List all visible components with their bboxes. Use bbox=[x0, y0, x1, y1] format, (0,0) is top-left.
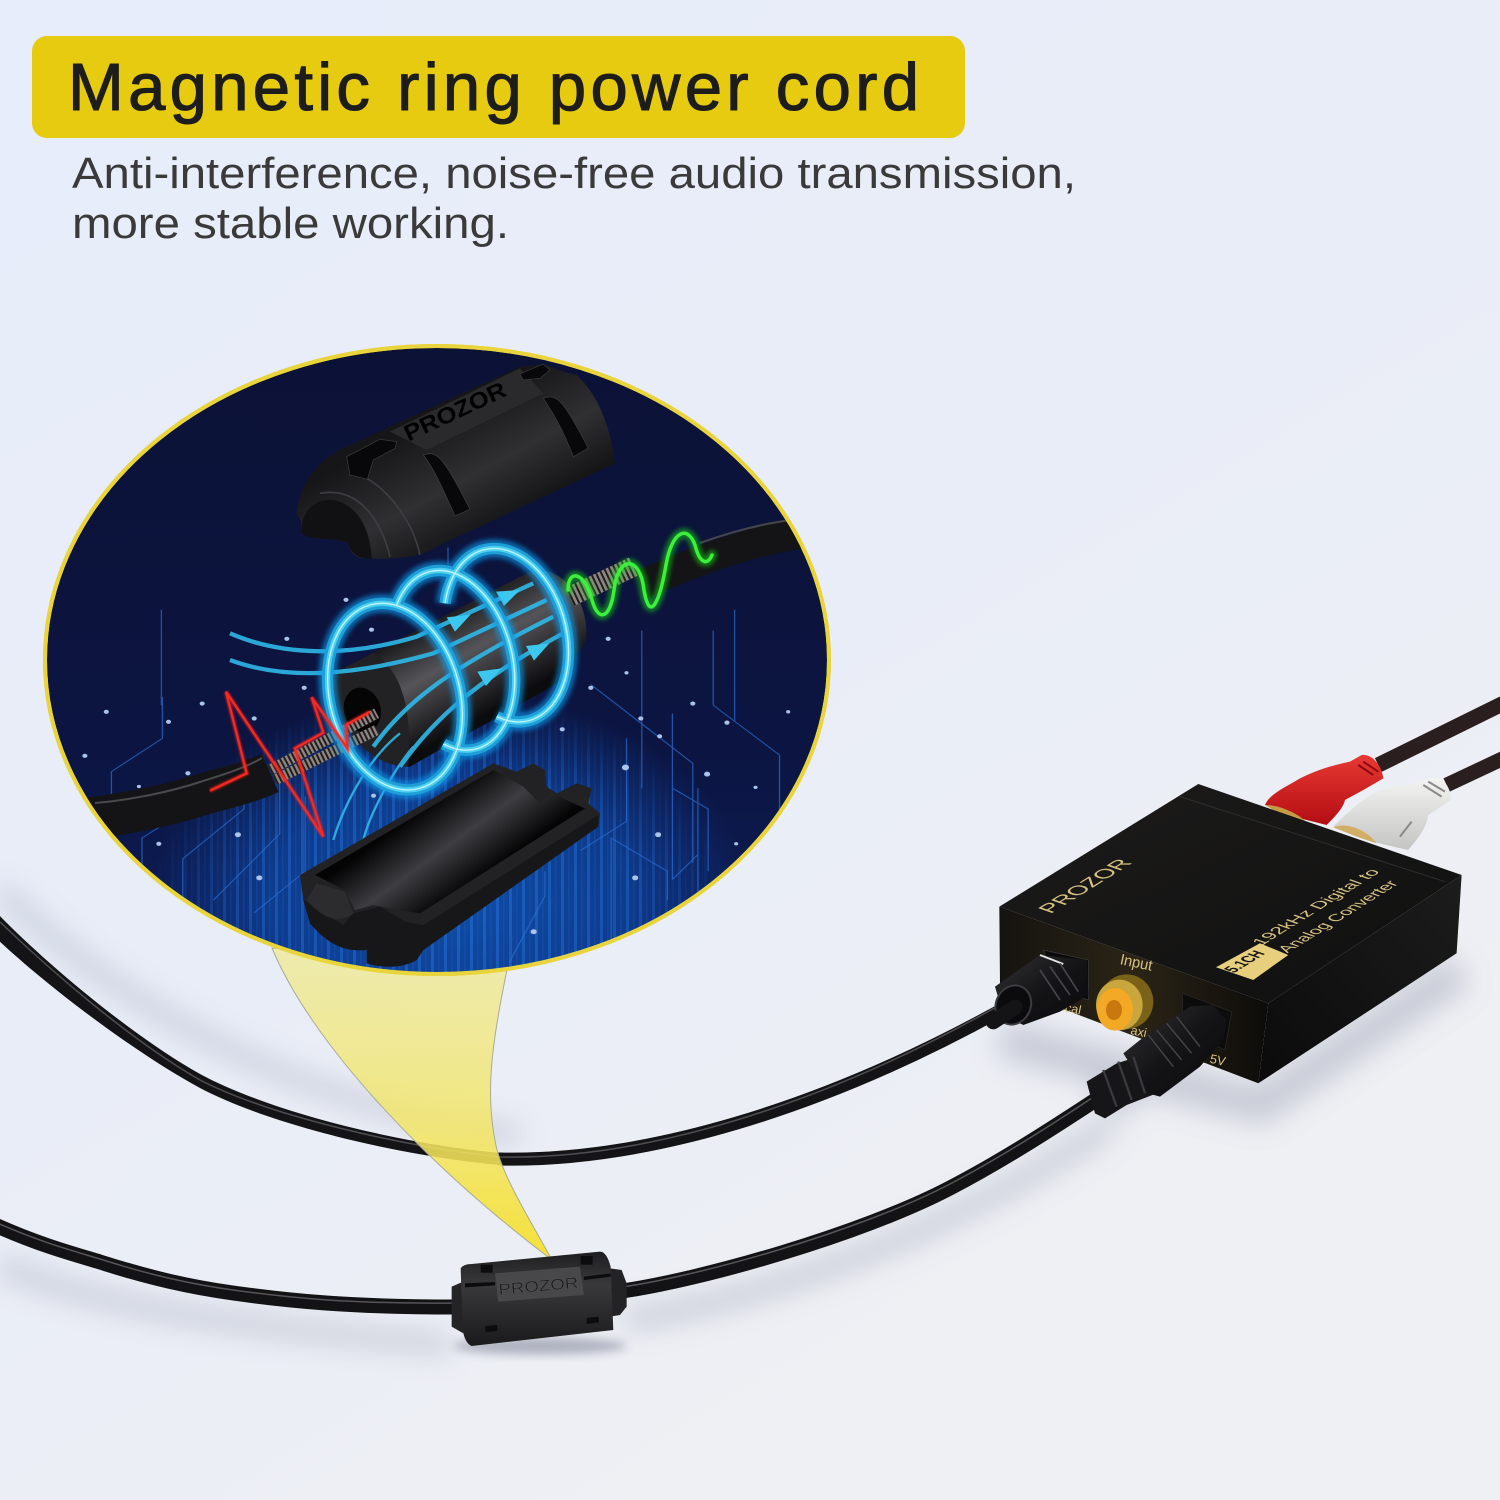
ring clips bbox=[465, 1256, 611, 1332]
magnetic ring on the power cable bbox=[452, 1252, 627, 1355]
circuit traces and dots bbox=[82, 548, 790, 962]
flow arrows bbox=[447, 590, 549, 686]
ring label plate bbox=[495, 1267, 584, 1302]
steel wires left bbox=[270, 713, 377, 780]
magnetic flow lines bbox=[230, 583, 563, 840]
shell cavity bbox=[315, 770, 585, 913]
subtitle text: more stable working. bbox=[72, 199, 509, 248]
top seam bbox=[1180, 797, 1445, 882]
clipped circle artwork bbox=[80, 364, 835, 980]
title banner: Magnetic ring power cord bbox=[68, 50, 919, 125]
coil highlights bbox=[326, 548, 570, 791]
callout beam bbox=[272, 948, 552, 1260]
device right face bbox=[1258, 875, 1462, 1083]
shell body bbox=[300, 763, 600, 967]
shell clip slots bbox=[347, 364, 588, 516]
power label: 5V bbox=[1209, 1052, 1227, 1069]
white RCA plug bbox=[1333, 777, 1451, 850]
input label: Input bbox=[1118, 951, 1155, 975]
core hole bbox=[344, 688, 381, 732]
data dots bbox=[82, 569, 790, 934]
shell end notch bbox=[307, 883, 353, 919]
upper ferrite shell bbox=[297, 364, 615, 559]
right cable bbox=[640, 530, 835, 585]
shell body bbox=[297, 364, 615, 559]
power cable bbox=[0, 1096, 1100, 1307]
green clean signal bbox=[568, 533, 712, 615]
coil inner band bbox=[308, 548, 569, 805]
audio converter device bbox=[999, 703, 1500, 1083]
ring shadow bbox=[453, 1337, 627, 1355]
5.1CH badge bbox=[1216, 943, 1288, 980]
device top face bbox=[999, 784, 1462, 1003]
circle yellow outline bbox=[45, 346, 829, 974]
lower ferrite shell bbox=[300, 763, 600, 967]
shell brand text: PROZOR bbox=[399, 376, 510, 446]
5.1CH badge: 5.1CH bbox=[1219, 948, 1269, 975]
right cable highlight bbox=[700, 520, 786, 544]
white plug tip bbox=[1333, 826, 1377, 843]
coil glow bbox=[308, 548, 569, 805]
shell top band bbox=[390, 368, 543, 450]
coaxial label: axi bbox=[1129, 1023, 1148, 1040]
rear RCA cables bbox=[1378, 703, 1500, 785]
coil rings bbox=[308, 548, 569, 805]
ferrite core bbox=[333, 570, 586, 767]
power plug bbox=[1087, 1005, 1227, 1118]
red plug grip bbox=[1358, 762, 1378, 775]
title banner bbox=[32, 36, 965, 138]
coaxial jack bbox=[1096, 974, 1153, 1031]
steel wires right bbox=[570, 567, 633, 597]
device front face bbox=[999, 907, 1268, 1083]
device front ports and plugs bbox=[989, 950, 1232, 1118]
coil and core artwork bbox=[210, 548, 633, 840]
optical label: ical bbox=[1061, 1000, 1083, 1018]
model text line 2: Analog Converter bbox=[1273, 878, 1403, 955]
circuit traces bbox=[111, 548, 779, 962]
shell ribs bbox=[320, 477, 420, 557]
optical plug bbox=[989, 955, 1088, 1030]
white plug grip bbox=[1400, 782, 1445, 837]
ring left end cap bbox=[452, 1282, 463, 1333]
red interference signal bbox=[210, 692, 370, 837]
shell nose bbox=[302, 500, 372, 559]
dark circle background bbox=[45, 346, 829, 974]
brand text: PROZOR bbox=[1033, 856, 1137, 915]
magnified view circle bbox=[45, 346, 835, 980]
left cable highlight bbox=[95, 758, 262, 803]
left cable bbox=[80, 773, 270, 820]
DC power port bbox=[1183, 993, 1232, 1050]
core end step bbox=[336, 662, 409, 767]
blue glow bbox=[170, 717, 727, 972]
red RCA plug bbox=[1265, 755, 1383, 825]
optical audio cable bbox=[0, 912, 1012, 1165]
red plug tip bbox=[1265, 805, 1305, 821]
optical port bbox=[1043, 950, 1088, 1000]
ring right end cap bbox=[610, 1268, 627, 1317]
ring brand text: PROZOR bbox=[498, 1275, 579, 1299]
blue stripes bbox=[171, 721, 707, 972]
subtitle text: Anti-interference, noise-free audio transmission, bbox=[72, 149, 1076, 198]
cable and device shadows bbox=[0, 890, 1460, 1345]
ring body bbox=[461, 1252, 613, 1346]
model text line 1: 192kHz Digital to bbox=[1247, 867, 1384, 947]
shell lower body bbox=[303, 815, 598, 967]
